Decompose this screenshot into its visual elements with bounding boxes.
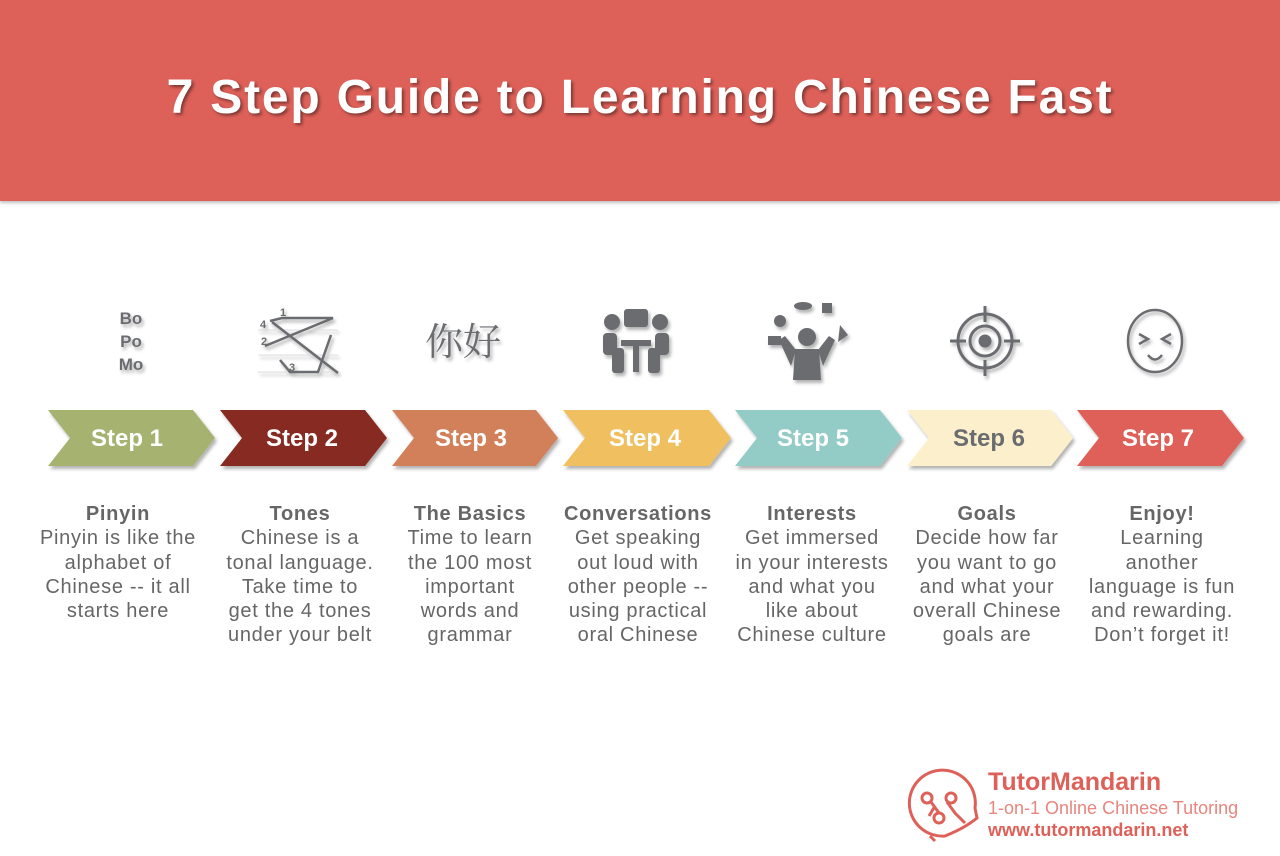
text: conversations: Get speaking <box>575 527 701 549</box>
icon: bopomo: Mo <box>119 355 143 374</box>
step 6 <box>907 410 1073 466</box>
step 5 <box>735 410 902 466</box>
text: interests <box>735 503 889 646</box>
text: basics: the 100 most <box>408 552 532 574</box>
text: tones: Chinese is a <box>241 527 359 549</box>
text: tones: under your belt <box>228 624 372 646</box>
step 4 <box>563 410 731 466</box>
text: goals: Goals <box>957 503 1017 525</box>
text: goals: you want to go <box>917 552 1057 574</box>
icon: ni hao: 你好 <box>425 311 501 366</box>
icon: smiley <box>1128 310 1182 372</box>
step 6: Step 6 <box>953 425 1025 452</box>
text: basics <box>407 503 533 646</box>
text: interests: in your interests <box>735 552 889 574</box>
title: 7 Step Guide to Learning Chinese Fast <box>167 71 1113 124</box>
text: tones: Take time to <box>242 576 358 598</box>
text: conversations: Conversations <box>564 503 712 525</box>
text: conversations: out loud with <box>577 552 699 574</box>
text: basics: important <box>425 576 515 598</box>
text: interests: Chinese culture <box>737 624 887 646</box>
text: pinyin: Pinyin is like the <box>40 527 196 549</box>
text: enjoy: another <box>1126 552 1198 574</box>
icon: target <box>950 306 1020 376</box>
step 7 <box>1077 410 1244 466</box>
text: pinyin: alphabet of <box>65 552 171 574</box>
text: enjoy: language is fun <box>1089 576 1235 598</box>
logo icon <box>908 768 979 842</box>
text: pinyin: starts here <box>67 600 169 622</box>
text: goals <box>913 503 1061 646</box>
text: tones <box>226 503 374 646</box>
text: tones: get the 4 tones <box>229 600 371 622</box>
header banner <box>0 0 1280 201</box>
step 1: Step 1 <box>91 425 163 452</box>
icon: interests juggler <box>768 302 848 380</box>
text: interests: Interests <box>767 503 857 525</box>
icon: bopomo: Po <box>120 332 142 351</box>
text: basics: Time to learn <box>407 527 533 549</box>
text: interests: like about <box>766 600 858 622</box>
text: tones: Tones <box>270 503 330 525</box>
text: pinyin <box>40 503 196 622</box>
steps chevrons and icons <box>48 302 1247 471</box>
step 3: Step 3 <box>435 425 507 452</box>
text: pinyin: Pinyin <box>86 503 150 525</box>
icon: tones: 1 <box>280 307 286 319</box>
text: basics: words and <box>421 600 519 622</box>
icon: bopomo <box>119 309 143 374</box>
text: enjoy: Don’t forget it! <box>1094 624 1230 646</box>
text: conversations <box>564 503 712 646</box>
text: goals: goals are <box>943 624 1031 646</box>
text: conversations: oral Chinese <box>578 624 698 646</box>
text: conversations: other people -- <box>568 576 708 598</box>
text: basics: The Basics <box>414 503 526 525</box>
text: enjoy: Learning <box>1120 527 1204 549</box>
text: pinyin: Chinese -- it all <box>45 576 191 598</box>
icon: tones: 4 <box>260 319 267 331</box>
url: www.tutormandarin.net <box>988 820 1188 840</box>
step 2: Step 2 <box>266 425 338 452</box>
icon: tones: 2 <box>261 336 267 348</box>
step 1 <box>48 410 215 466</box>
text: basics: grammar <box>428 624 512 646</box>
text: tones: tonal language. <box>226 552 374 574</box>
icon: tones <box>258 307 338 374</box>
text: interests: and what you <box>748 576 876 598</box>
text: interests: Get immersed <box>745 527 879 549</box>
step 4: Step 4 <box>609 425 682 452</box>
step 3 <box>392 410 558 466</box>
icon: conversation <box>603 309 669 373</box>
step 2 <box>220 410 387 466</box>
text: conversations: using practical <box>569 600 707 622</box>
text: goals: Decide how far <box>915 527 1059 549</box>
text: goals: overall Chinese <box>913 600 1061 622</box>
step 5: Step 5 <box>777 425 849 452</box>
chevrons <box>48 410 1244 466</box>
text: enjoy: Enjoy! <box>1129 503 1195 525</box>
text: goals: and what your <box>920 576 1054 598</box>
step 7: Step 7 <box>1122 425 1194 452</box>
text: enjoy <box>1089 503 1235 646</box>
brand name: TutorMandarin <box>988 768 1161 796</box>
text: enjoy: and rewarding. <box>1091 600 1233 622</box>
logo <box>908 768 1238 842</box>
icon: bopomo: Bo <box>120 309 142 328</box>
tagline: 1-on-1 Online Chinese Tutoring <box>988 798 1238 818</box>
icon: tones: 3 <box>289 362 295 374</box>
